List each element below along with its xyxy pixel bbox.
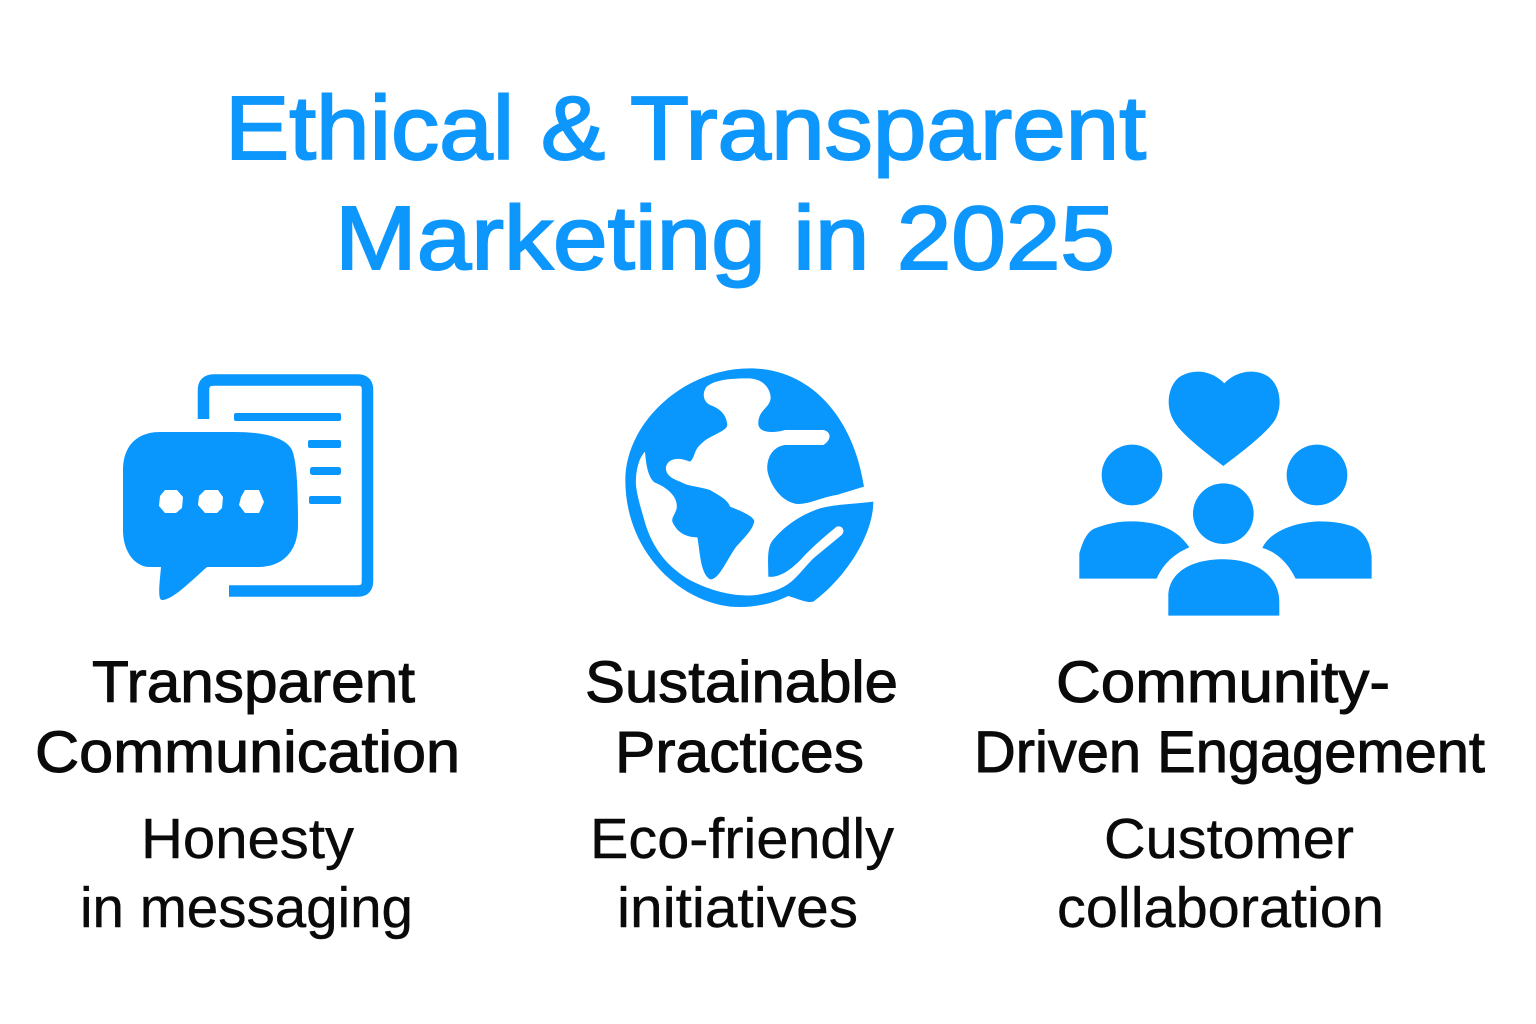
icon: chat bubble and document [123, 380, 368, 600]
heading: sustainable practices [585, 650, 898, 785]
description: honesty in messaging: Honesty [141, 807, 355, 871]
description: eco-friendly initiatives: initiatives [617, 876, 858, 940]
heading: community-driven engagement: Driven Engagement [974, 720, 1485, 785]
panel: community-driven engagement [974, 372, 1485, 940]
title: Ethical & Transparent [225, 79, 1146, 179]
icon: three people with heart [1079, 372, 1372, 616]
heading: transparent communication [35, 650, 460, 785]
heading: sustainable practices: Practices [615, 720, 864, 785]
description: customer collaboration: Customer [1104, 807, 1354, 871]
icon: globe with leaf [625, 368, 880, 607]
description: honesty in messaging [80, 807, 413, 940]
title: Marketing in 2025 [335, 189, 1115, 289]
panel: transparent communication [35, 380, 460, 940]
panel: sustainable practices [585, 368, 898, 940]
description: honesty in messaging: in messaging [80, 876, 413, 940]
description: customer collaboration [1057, 807, 1384, 940]
description: eco-friendly initiatives: Eco-friendly [590, 807, 894, 871]
heading: community-driven engagement: Community- [1056, 650, 1390, 715]
description: eco-friendly initiatives [590, 807, 894, 940]
description: customer collaboration: collaboration [1057, 876, 1384, 940]
heading: transparent communication: Transparent [92, 650, 415, 715]
heading: transparent communication: Communication [35, 720, 460, 785]
title [225, 79, 1146, 289]
heading: community-driven engagement [974, 650, 1485, 785]
heading: sustainable practices: Sustainable [585, 650, 898, 715]
